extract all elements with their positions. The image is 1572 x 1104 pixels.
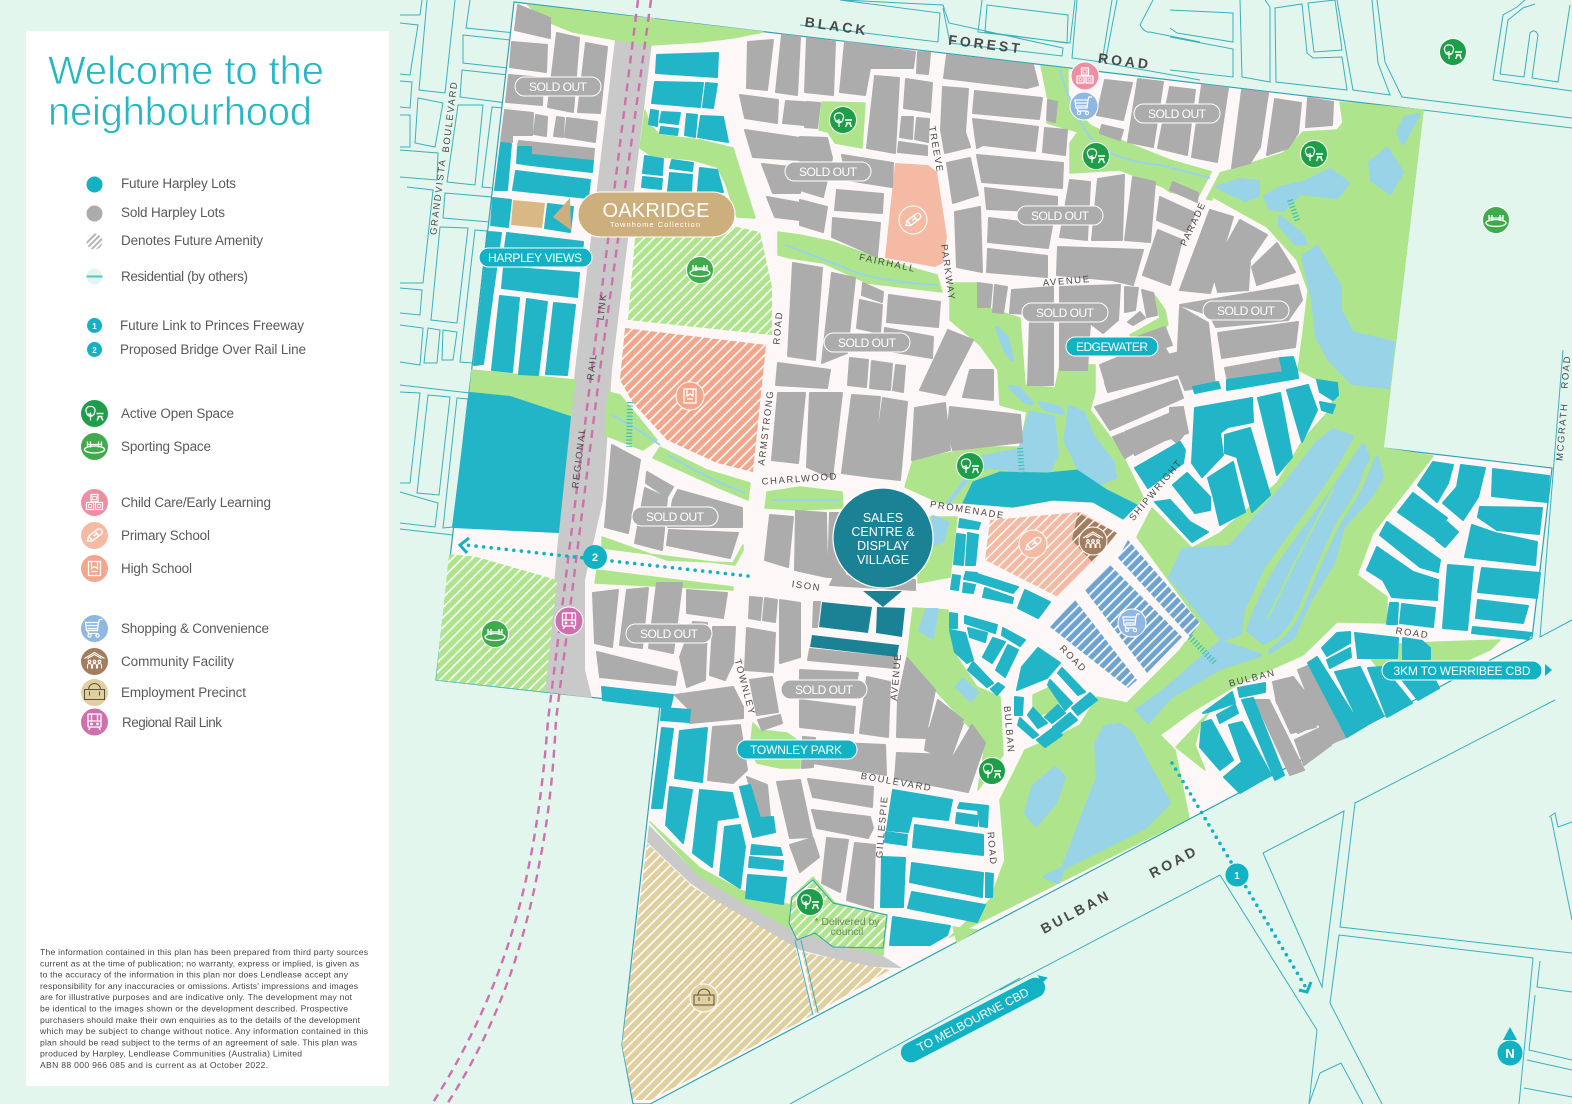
employment corridor — [647, 825, 902, 968]
street labels: LINK — [595, 292, 610, 321]
legend: road links: 2 — [92, 346, 97, 355]
water bodies — [612, 70, 1418, 882]
street labels: BOULEVARD — [860, 771, 933, 794]
sales centre callout: SALES — [863, 511, 903, 525]
street labels: ARMSTRONG — [756, 389, 777, 466]
regional rail corridor — [545, 15, 655, 698]
disclaimer: The information contained in this plan has been prepared from third party sources — [40, 947, 368, 957]
street labels: FOREST — [948, 32, 1024, 57]
disclaimer: to the accuracy of the information in this plan nor does Lendlease accept any — [40, 970, 349, 980]
sold out pills — [515, 77, 1289, 699]
street labels: BULBAN — [1001, 706, 1016, 754]
left legend panel — [26, 31, 389, 1086]
destination: werribee cbd: 3KM TO WERRIBEE CBD — [1394, 664, 1531, 678]
legend: amenities: Employment Precinct — [121, 685, 246, 700]
disclaimer: ABN 88 000 966 085 and is current as at October 2022. — [40, 1060, 268, 1070]
neighbourhood pills: TOWNLEY PARK — [750, 743, 842, 757]
sales centre callout — [833, 488, 933, 607]
street labels: TREEVE — [926, 125, 945, 174]
sales centre callout: VILLAGE — [857, 553, 909, 567]
community facility hatch — [1072, 513, 1117, 563]
street labels — [428, 14, 1572, 938]
street labels: PARKWAY — [938, 244, 957, 302]
title — [48, 49, 324, 134]
street labels: BULBAN — [1038, 886, 1113, 937]
street labels: PARADE — [1179, 200, 1209, 248]
shopping precinct road base — [1050, 537, 1200, 695]
legend: road links: 1 — [92, 322, 97, 331]
sold out pills: SOLD OUT — [795, 683, 854, 697]
regional rail link dashed lines — [432, 0, 651, 1104]
street labels: FAIRHALL — [858, 252, 917, 275]
legend: amenities — [81, 615, 269, 736]
wetland boardwalks — [629, 200, 1298, 663]
legend: lot types — [86, 176, 263, 284]
disclaimer: be identical to the images shown or the development described. Prospective — [40, 1004, 348, 1014]
north arrow: N — [1505, 1046, 1515, 1061]
street labels: BOULEVARD — [441, 80, 460, 153]
surrounding road network — [400, 0, 1572, 1104]
legend: road links: Proposed Bridge Over Rail Line — [120, 342, 306, 357]
legend: open space: Sporting Space — [121, 439, 211, 454]
legend: lot types: Residential (by others) — [121, 269, 248, 284]
sporting space south-west hatch — [436, 554, 557, 692]
future lots — [453, 53, 1549, 945]
sporting space hatch — [628, 227, 772, 335]
marker 1 — [1226, 864, 1248, 886]
council park hatch — [789, 880, 887, 948]
street labels: ROAD — [772, 310, 785, 345]
legend: education — [81, 489, 271, 582]
high school hatch — [620, 328, 766, 472]
street labels: council — [831, 926, 863, 938]
street labels: ROAD — [1395, 626, 1430, 641]
sales centre callout: DISPLAY — [857, 539, 910, 553]
disclaimer: produced by Harpley, Lendlease Communities (Australia) Limited — [40, 1049, 302, 1059]
legend: open space: Active Open Space — [121, 406, 234, 421]
disclaimer: plan should be read subject to the terms of an agreement of sale. This plan was — [40, 1037, 357, 1047]
street labels: * Delivered by — [814, 916, 880, 928]
destination: melbourne cbd: TO MELBOURNE CBD — [915, 985, 1032, 1055]
neighbourhood pills: EDGEWATER — [1076, 340, 1148, 354]
street labels: MCGRATH — [1554, 402, 1571, 461]
primary school solid — [885, 163, 947, 267]
legend: open space — [81, 400, 234, 460]
legend: amenities: Shopping & Convenience — [121, 621, 269, 636]
sold lots — [501, 5, 1347, 908]
boundary channel — [795, 940, 818, 1015]
legend: education: High School — [121, 561, 192, 576]
title: neighbourhood — [48, 90, 312, 134]
sold out pills: SOLD OUT — [1031, 209, 1090, 223]
shopping hatch — [1050, 540, 1200, 688]
sold out pills: SOLD OUT — [640, 627, 699, 641]
sold out pills: SOLD OUT — [838, 336, 897, 350]
destination: melbourne cbd — [897, 971, 1054, 1066]
disclaimer — [39, 947, 368, 1070]
sold out pills: SOLD OUT — [1148, 107, 1207, 121]
oakridge callout: OAKRIDGE — [602, 200, 710, 222]
disclaimer: are for illustrative purposes and are indicative only. The development may not — [40, 992, 353, 1002]
title: Welcome to the — [48, 49, 324, 93]
street labels: ROAD — [985, 831, 998, 866]
arrow: future link to princes freeway — [1172, 763, 1311, 992]
street labels: AVENUE — [889, 652, 904, 701]
street labels: RAIL — [585, 352, 600, 381]
employment precinct hatch — [622, 843, 890, 1100]
green open spaces — [470, 5, 1500, 955]
street labels: BLACK — [804, 14, 869, 38]
disclaimer: responsibility for any inaccuracies or omissions. Artists' impressions and images — [40, 981, 358, 991]
marker 2 — [583, 545, 607, 569]
site boundary — [436, 2, 1552, 1104]
legend: education: Child Care/Early Learning — [121, 495, 271, 510]
legend: road links — [87, 318, 306, 357]
sold out pills: SOLD OUT — [1036, 306, 1095, 320]
street labels: BULBAN — [1228, 667, 1277, 690]
disclaimer: which may be subject to change without notice. Any information contained in this — [39, 1026, 368, 1036]
street labels: PROMENADE — [929, 499, 1006, 522]
legend: amenities: Community Facility — [121, 654, 234, 669]
marker 1: 1 — [1234, 871, 1240, 882]
street labels: AVENUE — [1042, 274, 1091, 289]
sold out pills: SOLD OUT — [646, 510, 705, 524]
north arrow — [1498, 1027, 1522, 1066]
primary school hatch — [985, 512, 1117, 597]
arrow: proposed bridge over rail line — [460, 538, 748, 576]
street labels: ROAD — [1057, 643, 1089, 675]
lake feature — [963, 470, 1137, 519]
disclaimer: current as at the time of publication; no warranty, express or implied, is given as — [40, 958, 359, 968]
neighbourhood pills: HARPLEY VIEWS — [488, 251, 582, 265]
legend: lot types: Denotes Future Amenity — [121, 233, 263, 248]
street labels: CHARLWOOD — [761, 471, 838, 488]
legend: lot types: Sold Harpley Lots — [121, 205, 225, 220]
legend: road links: Future Link to Princes Freeway — [120, 318, 304, 333]
legend: education: Primary School — [121, 528, 210, 543]
street labels: TOWNLEY — [732, 658, 757, 717]
oakridge callout: Townhome Collection — [610, 220, 700, 229]
green slits in the lake — [1245, 440, 1373, 650]
sold out pills: SOLD OUT — [1217, 304, 1276, 318]
map icons — [482, 38, 1510, 1012]
parade road crossing the stream — [1195, 168, 1218, 212]
street labels: ROAD — [1097, 50, 1152, 72]
future amenity hatched areas — [628, 227, 772, 335]
street labels: ROAD — [1146, 842, 1201, 881]
neighbourhood pills — [479, 248, 1158, 759]
legend: amenities: Regional Rail Link — [122, 715, 222, 730]
street labels: GRANDVISTA — [428, 158, 449, 236]
destination: werribee cbd — [1382, 661, 1552, 680]
street labels: ISON — [791, 579, 822, 594]
disclaimer: purchasers should make their own enquiries as to the details of the development — [40, 1015, 361, 1025]
marker 2: 2 — [592, 552, 598, 564]
sold out pills: SOLD OUT — [799, 165, 858, 179]
display village lots — [810, 602, 905, 657]
legend: lot types: Future Harpley Lots — [121, 176, 236, 191]
street labels: GILLESPIE — [874, 795, 891, 859]
oakridge lot — [511, 200, 545, 228]
street labels: REGIONAL — [570, 426, 589, 489]
sold out pills: SOLD OUT — [529, 80, 588, 94]
oakridge callout — [553, 192, 735, 237]
sales centre callout: CENTRE & — [851, 525, 915, 539]
street labels: SHIPWRIGHT — [1127, 457, 1185, 523]
